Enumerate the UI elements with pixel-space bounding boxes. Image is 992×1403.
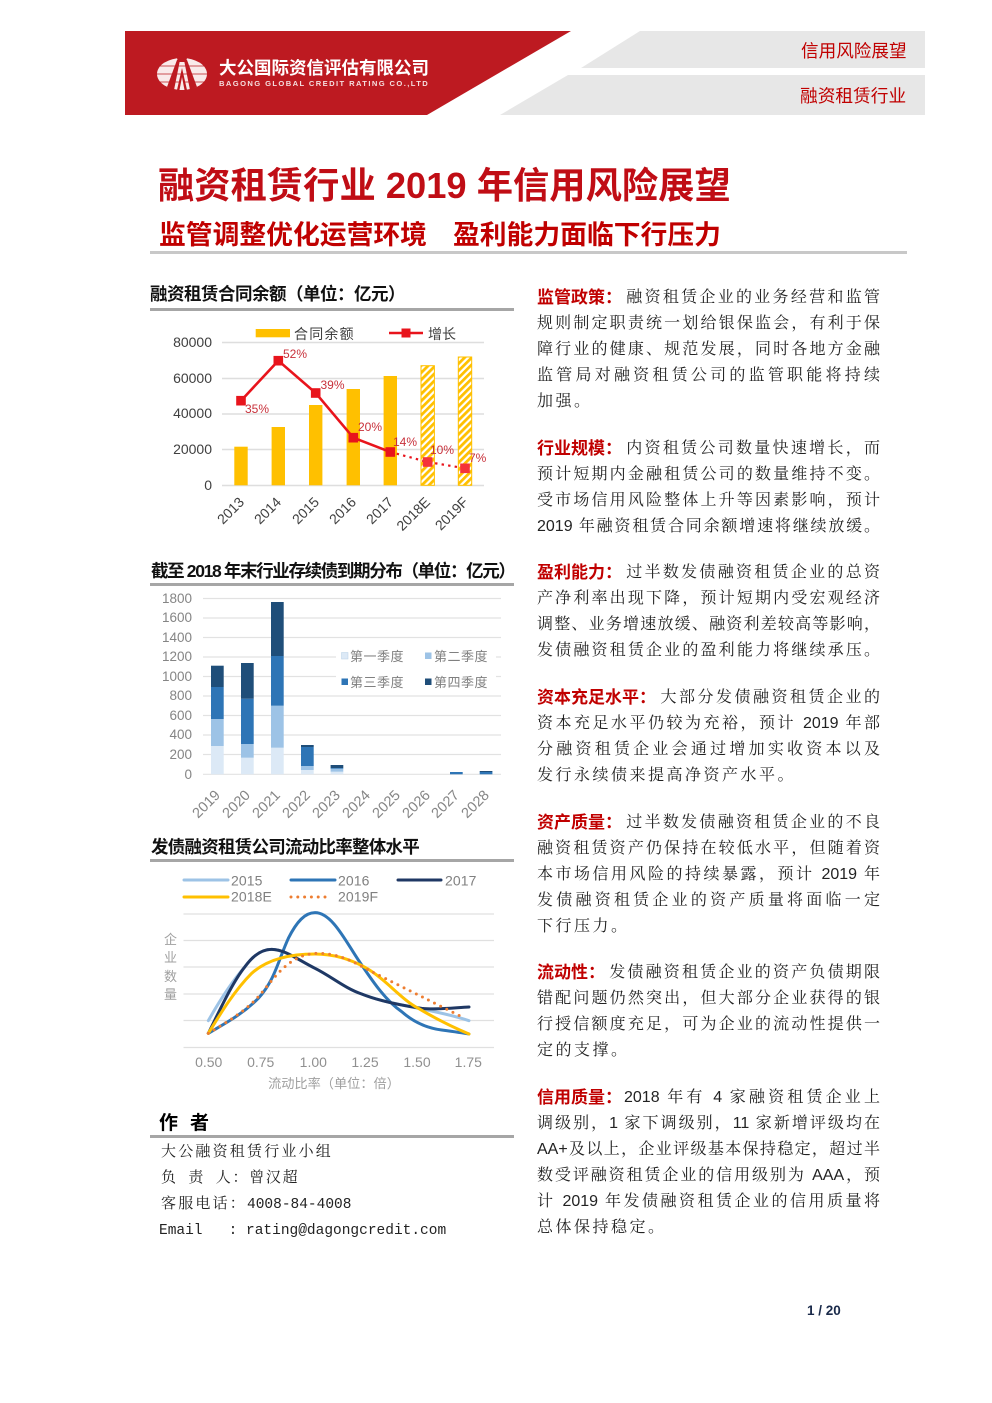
y axis title: 数	[164, 969, 177, 984]
text: industry scale: 2019 年融资租赁合同余额增速将继续放缓。	[537, 518, 880, 535]
text: liquidity	[537, 958, 880, 1059]
x axis labels: 1.50	[403, 1054, 431, 1070]
x axis labels: 2023	[310, 788, 344, 822]
text: liquidity: 行授信额度充足，可为企业的流动性提供一	[537, 1016, 880, 1033]
legend	[336, 645, 496, 691]
y axis labels: 0	[184, 767, 192, 782]
legend	[256, 326, 456, 342]
heading: contract balance chart: 融资租赁合同余额（单位：亿元）	[150, 281, 405, 306]
growth labels: 7%	[469, 451, 487, 465]
y axis labels: 1400	[162, 630, 192, 645]
subtitle: 监管调整优化运营环境 盈利能力面临下行压力	[159, 213, 721, 252]
text: capital adequacy: 资本充足水平仍较为充裕，预计 2019 年部	[537, 715, 880, 732]
x axis labels: 2026	[400, 788, 434, 822]
heading: current ratio chart: 发债融资租赁公司流动比率整体水平	[151, 834, 419, 859]
text: industry scale: 内资租赁公司数量快速增长，而	[624, 440, 880, 457]
text: asset quality: 下行压力。	[537, 918, 630, 935]
x axis labels: 2018E	[393, 494, 433, 534]
page number: 1 / 20	[807, 1303, 841, 1318]
y axis labels	[173, 334, 212, 493]
text: credit quality: 数受评融资租赁企业的信用级别为 AAA，预	[537, 1167, 880, 1184]
text: credit quality: 调级别，1 家下调级别，11 家新增评级均在	[537, 1115, 880, 1132]
text: liquidity: 定的支撑。	[537, 1042, 630, 1059]
text: asset quality: 融资租赁资产仍保持在较低水平，但随着资	[537, 840, 880, 857]
icon: company logo	[157, 58, 207, 90]
text: regulatory policy: 障行业的健康、规范发展，同时各地方金融	[537, 341, 880, 358]
x axis labels: 2028	[459, 788, 493, 822]
curve chart: current ratio distribution	[164, 872, 494, 1091]
author block	[159, 1143, 446, 1239]
stacked bars	[211, 602, 492, 774]
y axis labels: 400	[169, 727, 192, 742]
legend: 合同余额	[294, 326, 355, 342]
stacked bar chart: bond maturity	[162, 591, 501, 822]
text: capital adequacy: 分融资租赁企业会通过增加实收资本以及	[537, 741, 880, 758]
y axis title: 业	[164, 950, 177, 965]
y axis labels: 1000	[162, 669, 192, 684]
text: regulatory policy: 加强。	[537, 393, 593, 410]
text: liquidity: 发债融资租赁企业的资产负债期限	[607, 964, 880, 981]
x axis labels: 0.50	[195, 1054, 223, 1070]
y axis labels: 40000	[173, 405, 212, 421]
x axis labels	[195, 1054, 482, 1070]
company english name: BAGONG GLOBAL CREDIT RATING CO.,LTD	[219, 79, 429, 88]
legend: 第三季度	[350, 675, 404, 690]
heading: authors: 作 者	[159, 1108, 209, 1135]
growth labels	[245, 347, 487, 465]
y axis labels: 800	[169, 688, 192, 703]
legend: 2019F	[338, 888, 378, 904]
legend: 2015	[231, 872, 263, 888]
growth line	[236, 356, 470, 473]
text: industry scale: 预计短期内金融租赁公司的数量维持不变。	[537, 466, 880, 483]
tab label: industry: 融资租赁行业	[800, 82, 906, 108]
legend: 2016	[338, 872, 370, 888]
x axis labels: 2024	[340, 788, 374, 822]
text: credit quality: 信用质量：	[537, 1083, 622, 1108]
legend	[184, 872, 477, 904]
tab label: credit risk outlook: 信用风险展望	[801, 38, 907, 63]
text: capital adequacy	[537, 683, 880, 784]
company name: 大公国际资信评估有限公司	[219, 55, 429, 80]
x axis labels: 2019	[190, 788, 224, 822]
y axis labels: 80000	[173, 334, 212, 350]
text: asset quality: 过半数发债融资租赁企业的不良	[624, 814, 880, 831]
text: asset quality: 资产质量：	[537, 808, 622, 833]
text: asset quality	[537, 808, 880, 935]
text: credit quality: 计 2019 年发债融资租赁企业的信用质量将	[537, 1193, 880, 1210]
header banner	[125, 31, 925, 115]
x axis labels: 1.75	[455, 1054, 482, 1070]
text: credit quality: 2018 年有 4 家融资租赁企业上	[624, 1089, 880, 1106]
x axis labels: 2020	[220, 788, 254, 822]
text: capital adequacy: 大部分发债融资租赁企业的	[658, 689, 880, 706]
y axis labels: 0	[204, 477, 212, 493]
text: capital adequacy: 资本充足水平：	[537, 683, 656, 708]
title: 融资租赁行业 2019 年信用风险展望	[158, 165, 731, 206]
legend: 第一季度	[350, 649, 404, 664]
x axis labels: 2015	[289, 494, 322, 527]
y axis labels: 20000	[173, 441, 212, 457]
y axis labels: 1600	[162, 610, 192, 625]
y axis labels: 60000	[173, 370, 212, 386]
text: profitability: 调整、业务增速放缓、融资利差较高等影响，	[537, 616, 880, 633]
bars	[234, 357, 472, 485]
x axis labels: 2021	[250, 788, 284, 822]
x axis labels: 2022	[280, 788, 314, 822]
x axis labels: 1.00	[300, 1054, 327, 1070]
text: regulatory policy: 融资租赁企业的业务经营和监管	[624, 289, 880, 306]
y axis title	[164, 932, 177, 1002]
text: asset quality: 发债融资租赁企业的资产质量将面临一定	[537, 892, 880, 909]
y axis labels: 600	[169, 708, 192, 723]
heading: bond maturity chart: 截至 2018 年末行业存续债到期分布（单位：亿元）	[151, 561, 515, 581]
text: regulatory policy	[537, 283, 880, 410]
text: credit quality: AA+及以上，企业评级基本保持稳定，超过半	[537, 1141, 880, 1158]
legend: 第二季度	[434, 649, 488, 664]
y axis labels	[162, 591, 192, 782]
y axis labels: 1200	[162, 649, 192, 664]
text: capital adequacy: 发行永续债来提高净资产水平。	[537, 767, 796, 784]
text: regulatory policy: 监管政策：	[537, 283, 622, 308]
growth labels: 39%	[320, 378, 345, 392]
x axis labels	[190, 788, 493, 822]
text: industry scale: 行业规模：	[537, 434, 622, 459]
legend: 2018E	[231, 888, 272, 904]
text: profitability: 产净利率出现下降，预计短期内受宏观经济	[537, 590, 880, 607]
text: profitability: 盈利能力：	[537, 558, 622, 583]
x axis labels: 2027	[429, 788, 463, 822]
text: credit quality: 总体保持稳定。	[537, 1219, 667, 1236]
y axis labels: 1800	[162, 591, 192, 606]
text: liquidity: 错配问题仍然突出，但大部分企业获得的银	[537, 990, 880, 1007]
text: regulatory policy: 规则制定职责统一划给银保监会，有利于保	[537, 315, 880, 332]
y axis title: 企	[164, 932, 177, 947]
header shapes: red banner and grey tabs	[125, 31, 925, 115]
y axis labels: 200	[169, 747, 192, 762]
text: asset quality: 本市场信用风险的持续暴露，预计 2019 年	[537, 866, 880, 883]
x axis labels: 2025	[370, 788, 404, 822]
phone: 客服电话：4008-84-4008	[161, 1196, 351, 1213]
legend: 第四季度	[434, 675, 488, 690]
x axis labels: 2014	[251, 494, 284, 527]
x axis labels: 2013	[214, 494, 247, 527]
text: industry scale	[537, 434, 880, 535]
email: Email : rating@dagongcredit.com	[159, 1223, 446, 1239]
text: credit quality	[537, 1083, 880, 1236]
legend: 增长	[428, 326, 456, 342]
x axis labels: 1.25	[351, 1054, 379, 1070]
text: profitability	[537, 558, 880, 659]
bar and line chart: contract balance	[173, 326, 487, 534]
growth labels: 52%	[283, 347, 307, 361]
legend: 2017	[445, 872, 477, 888]
x axis title: 流动比率（单位：倍）	[268, 1075, 400, 1091]
x axis labels: 2017	[363, 494, 396, 527]
team name: 大公融资租赁行业小组	[161, 1144, 333, 1161]
x axis labels: 2016	[326, 494, 359, 527]
growth labels: 10%	[430, 443, 454, 457]
text: profitability: 发债融资租赁企业的盈利能力将继续承压。	[537, 642, 880, 659]
curves	[208, 913, 469, 1034]
x axis labels: 0.75	[247, 1054, 275, 1070]
text: regulatory policy: 监管局对融资租赁公司的监管职能将持续	[537, 367, 880, 384]
y axis title: 量	[164, 987, 177, 1002]
x axis labels	[214, 494, 471, 534]
text: profitability: 过半数发债融资租赁企业的总资	[624, 564, 880, 581]
text: liquidity: 流动性：	[537, 958, 605, 983]
growth labels: 20%	[358, 420, 382, 434]
text: industry scale: 受市场信用风险整体上升等因素影响，预计	[537, 492, 880, 509]
x axis labels: 2019F	[432, 494, 471, 533]
growth labels: 35%	[245, 402, 269, 416]
lead analyst: 负 责 人：曾汉超	[161, 1170, 299, 1187]
growth labels: 14%	[393, 435, 417, 449]
